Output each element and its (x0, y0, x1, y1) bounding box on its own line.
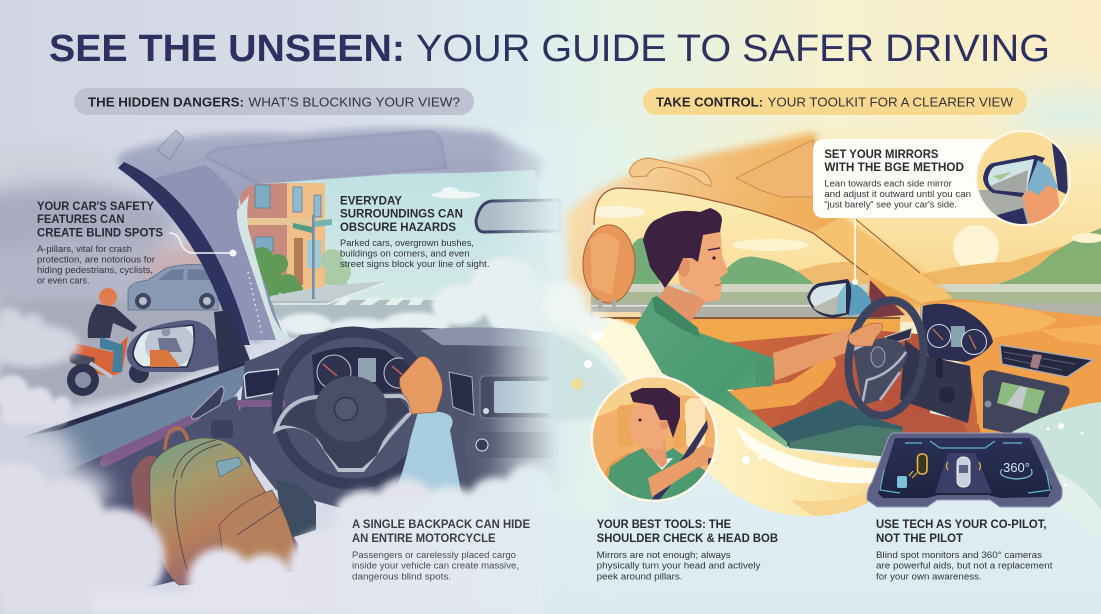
wheels (67, 363, 149, 396)
text block: everyday surroundings (340, 194, 490, 270)
seat shape (276, 480, 316, 540)
building (240, 183, 325, 291)
portrait arm (648, 445, 718, 497)
text block: backpack: dangerous blind spots. (352, 572, 451, 582)
torso (635, 298, 787, 448)
motorcyclist (66, 288, 149, 396)
text block: best tools (597, 517, 778, 582)
door window view (590, 189, 868, 317)
callout body (824, 178, 971, 210)
fog clouds (0, 307, 630, 614)
text block: best tools: YOUR BEST TOOLS: THE (597, 517, 731, 531)
neck (657, 285, 707, 330)
portrait hair (630, 388, 680, 438)
rolled sleeve (755, 352, 774, 387)
driver hand and arm (388, 356, 462, 512)
text block: everyday surroundings: EVERYDAY (340, 194, 402, 208)
armrest (722, 357, 836, 412)
text block: backpack: A SINGLE BACKPACK CAN HIDE (352, 517, 530, 531)
callout body: “just barely” see your car's side. (824, 200, 957, 210)
dash vent left (244, 369, 280, 398)
side mirror (127, 320, 219, 372)
grab handle (629, 158, 711, 186)
hair (643, 208, 722, 288)
text block: backpack: Passengers or carelessly placed cargo (352, 550, 516, 561)
text block: use tech: USE TECH AS YOUR CO-PILOT, (876, 517, 1046, 531)
legs (767, 400, 903, 457)
outside sky and landscape (780, 122, 1101, 322)
jacket (88, 304, 137, 338)
driver (635, 208, 903, 457)
text block: use tech: are powerful aids, but not a replacement (876, 560, 1053, 572)
rear view mirror (476, 200, 560, 232)
callout body: and adjust it outward until you can (824, 189, 971, 200)
forearm (773, 325, 870, 381)
inner pillar (868, 280, 905, 318)
360 icon (1001, 460, 1032, 479)
dashboard (237, 327, 600, 530)
collar (652, 296, 700, 338)
text block: everyday surroundings: street signs block your line of sight. (340, 259, 490, 270)
backpack (131, 428, 298, 585)
text block: use tech: NOT THE PILOT (876, 531, 964, 545)
text block: safety features: protection, are notorious for (37, 254, 156, 266)
callout heading: WITH THE BGE METHOD (824, 160, 964, 174)
headrest (583, 225, 635, 312)
lower left cloud (0, 375, 71, 424)
callout: set your mirrors (813, 139, 1013, 285)
text block: safety features: or even cars. (37, 276, 90, 286)
text block: use tech: for your own awareness. (876, 572, 982, 582)
bike body (66, 336, 128, 377)
ear (678, 257, 690, 277)
sun visor (736, 140, 815, 197)
callout heading: SET YOUR MIRRORS (824, 147, 938, 161)
left teal wave (550, 333, 620, 420)
text block: backpack (352, 517, 530, 582)
purple trim (100, 412, 200, 467)
portrait shirt (608, 448, 708, 503)
air vent (1000, 345, 1093, 377)
dash vent right (449, 372, 474, 415)
street sign (293, 215, 332, 299)
mist between the two scenes (490, 126, 615, 516)
navigation screen (983, 370, 1070, 436)
a-pillar base post (214, 310, 250, 372)
ground (268, 281, 560, 340)
yellow stripe (790, 488, 884, 516)
text block: best tools: SHOULDER CHECK & HEAD BOB (597, 531, 778, 545)
car icons (897, 454, 980, 488)
distant cloud (432, 187, 480, 198)
heading pill: take control: TAKE CONTROL: (656, 96, 763, 110)
side mirror right (807, 279, 871, 318)
clouds near seat (543, 281, 609, 333)
text block: best tools: Mirrors are not enough; always (597, 550, 731, 561)
roof lining (118, 127, 545, 340)
title (49, 28, 1050, 70)
sun visor (207, 131, 446, 184)
door panel right (600, 317, 930, 440)
small vent (885, 328, 912, 344)
steering wheel (276, 332, 429, 484)
portrait neck (643, 440, 667, 468)
a-pillar and frame (594, 140, 953, 318)
text block: safety features: FEATURES CAN (37, 212, 124, 226)
windshield view (237, 170, 575, 340)
heading pill: hidden dangers: WHAT'S BLOCKING YOUR VIEW? (248, 96, 460, 110)
fog behind the car (0, 149, 235, 318)
red lower panel (860, 400, 990, 450)
seat belt (650, 420, 708, 503)
wheel hub (853, 338, 908, 405)
text block: safety features: YOUR CAR'S SAFETY (37, 199, 154, 213)
bushes (251, 247, 351, 298)
title: YOUR GUIDE TO SAFER DRIVING (416, 28, 1050, 70)
inset: shoulder check portrait (590, 375, 720, 503)
text block: use tech: Blind spot monitors and 360° cameras (876, 550, 1042, 561)
a-pillar (118, 162, 288, 345)
tech panel: dashboard display (867, 433, 1062, 507)
grab clip (157, 130, 184, 160)
heading pill: take control (643, 88, 1027, 115)
infotainment screen (480, 376, 570, 418)
helmet (99, 288, 117, 306)
steering wheel right (841, 295, 931, 421)
eye, brow and mouth (708, 248, 721, 285)
inset: mirror adjustment (975, 130, 1071, 226)
text block: safety features: CREATE BLIND SPOTS (37, 226, 163, 240)
right scene: sunny car interior (543, 122, 1101, 540)
text block: everyday surroundings: OBSCURE HAZARDS (340, 220, 456, 234)
face (675, 225, 728, 302)
callout body: Lean towards each side mirror (824, 178, 953, 190)
text block: everyday surroundings: Parked cars, overgrown bushes, (340, 238, 474, 249)
legs (100, 337, 123, 372)
white stripe (735, 425, 885, 483)
text block: safety features: hiding pedestrians, cyclists, (37, 265, 153, 276)
text block: everyday surroundings: SURROUNDINGS CAN (340, 206, 463, 220)
portrait face (628, 400, 668, 450)
instrument hood (922, 304, 993, 362)
hand on wheel (848, 323, 882, 346)
callout heading (824, 147, 964, 174)
text block: use tech (876, 517, 1053, 582)
seat back (592, 312, 660, 360)
cluster dials (928, 324, 986, 354)
right wave (1012, 402, 1101, 540)
text block: best tools: physically turn your head and actively (597, 560, 761, 572)
pointer to a-pillar (169, 233, 236, 256)
left scene: foggy car interior (0, 124, 560, 614)
heading pill: hidden dangers: THE HIDDEN DANGERS: (88, 96, 244, 110)
cloud bank (279, 257, 575, 340)
text block: backpack: inside your vehicle can create massive, (352, 560, 519, 572)
text block: safety features (37, 199, 163, 286)
heading pill: take control: YOUR TOOLKIT FOR A CLEARER VIEW (768, 96, 1013, 110)
door handle (192, 387, 224, 419)
parked car (128, 264, 218, 310)
console (900, 340, 972, 423)
360 icon: 360° (1003, 460, 1030, 475)
text block: everyday surroundings: buildings on corners, and even (340, 248, 470, 260)
side road (0, 300, 245, 420)
roof lining right (566, 132, 953, 320)
text block: backpack: AN ENTIRE MOTORCYCLE (352, 531, 496, 545)
title: SEE THE UNSEEN: (49, 28, 405, 70)
heading pill: hidden dangers (74, 88, 474, 115)
door fog (0, 425, 110, 512)
upper left cloud (0, 307, 80, 367)
dashboard right (860, 299, 1101, 450)
cream main band (578, 318, 892, 516)
text block: safety features: A-pillars, vital for crash (37, 244, 132, 255)
door panel (20, 362, 262, 592)
text block: best tools: peek around pillars. (597, 572, 683, 582)
swoosh (550, 318, 892, 516)
